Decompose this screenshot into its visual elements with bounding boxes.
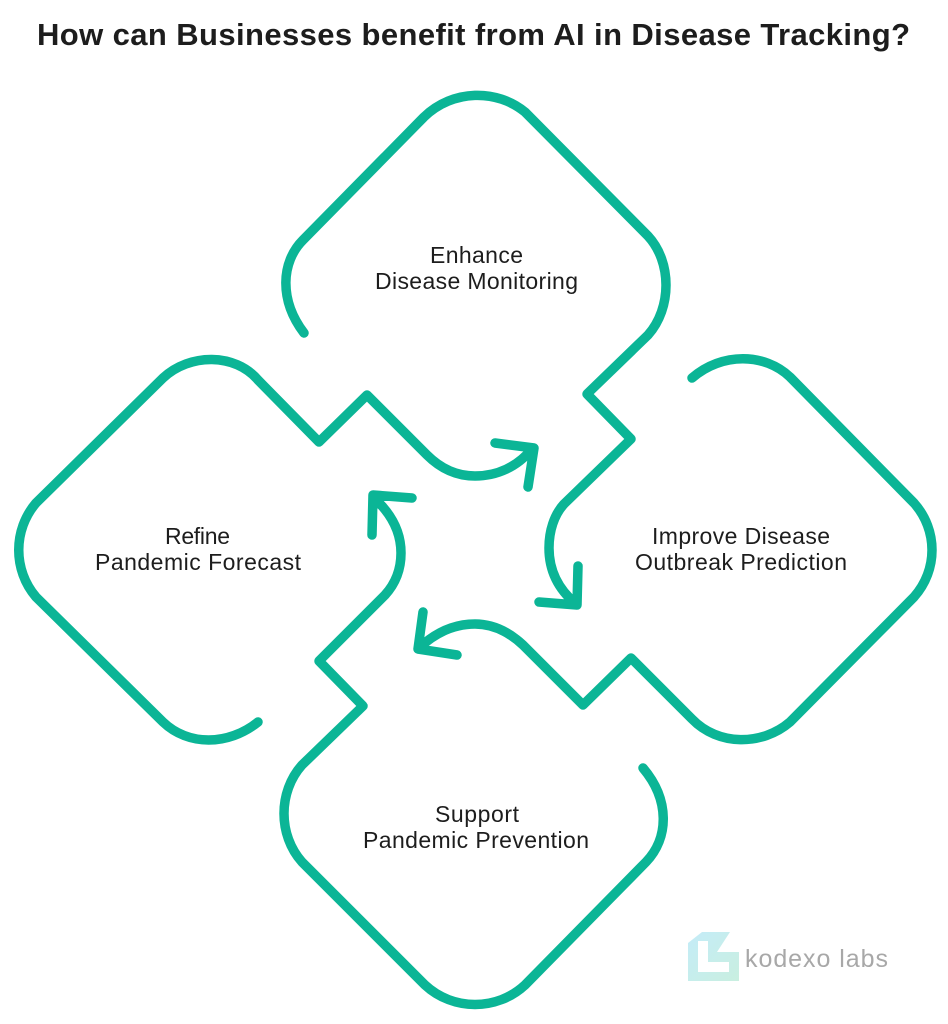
label: refine pandemic forecast (95, 523, 302, 575)
panel: enhance disease monitoring (286, 95, 666, 605)
label: refine pandemic forecast: Pandemic Forecast (95, 549, 302, 575)
arrow outline: top shape (286, 95, 666, 605)
title: How can Businesses benefit from AI in Disease Tracking? (37, 17, 910, 52)
panel: improve disease outbreak prediction (418, 359, 932, 740)
label: support pandemic prevention: Support (435, 801, 520, 827)
label: improve disease outbreak prediction: Improve Disease (652, 523, 830, 549)
label: enhance disease monitoring: Disease Monitoring (375, 268, 578, 294)
label: improve disease outbreak prediction: Outbreak Prediction (635, 549, 847, 575)
label: support pandemic prevention: Pandemic Prevention (363, 827, 589, 853)
panel: refine pandemic forecast (19, 359, 534, 740)
panel: support pandemic prevention (284, 495, 663, 1004)
arrow outline: left shape (19, 359, 534, 740)
label: enhance disease monitoring (375, 242, 578, 294)
label: refine pandemic forecast: Refine (165, 523, 230, 549)
icon: logo mark (688, 932, 739, 981)
arrow outline: right shape (418, 359, 932, 740)
logo wordmark: kodexo labs (745, 945, 888, 973)
label: enhance disease monitoring: Enhance (430, 242, 523, 268)
label: support pandemic prevention (363, 801, 589, 853)
logo: kodexo labs (688, 932, 888, 981)
label: improve disease outbreak prediction (635, 523, 847, 575)
arrow outline: bottom shape (284, 495, 663, 1004)
